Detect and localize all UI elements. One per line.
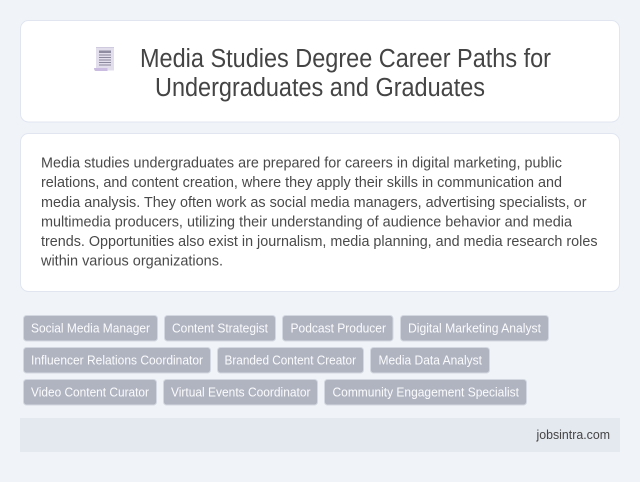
tag: Content Strategist: Content Strategist xyxy=(172,320,268,336)
panel: header card xyxy=(20,20,620,122)
tag: Podcast Producer: Podcast Producer xyxy=(290,320,387,336)
tag: Influencer Relations Coordinator: Influencer Relations Coordinator xyxy=(31,352,204,368)
tag: Digital Marketing Analyst xyxy=(400,316,548,341)
title: Media Studies Degree Career Paths for xyxy=(140,45,551,73)
tag: Digital Marketing Analyst: Digital Marketing Analyst xyxy=(408,320,541,336)
tag: Social Media Manager xyxy=(24,316,158,341)
tag: Video Content Curator xyxy=(24,380,156,405)
tag: Branded Content Creator xyxy=(218,348,364,373)
tag: Community Engagement Specialist xyxy=(324,380,526,405)
panel: description card xyxy=(20,134,620,292)
tag: Video Content Curator: Video Content Curator xyxy=(31,384,150,400)
tag: Content Strategist xyxy=(164,316,276,341)
footer source: jobsintra.com: jobsintra.com xyxy=(536,427,610,442)
footer bar xyxy=(20,418,620,452)
tag: Podcast Producer xyxy=(282,316,393,341)
tag: Virtual Events Coordinator xyxy=(164,380,318,405)
tags: career paths xyxy=(24,316,548,405)
tag: Influencer Relations Coordinator xyxy=(24,348,210,373)
title xyxy=(140,45,551,102)
tag: Social Media Manager: Social Media Manager xyxy=(31,320,151,336)
description text: relations, and content creation, where they apply their skills in communication and xyxy=(41,175,562,191)
tag: Community Engagement Specialist: Community Engagement Specialist xyxy=(332,384,519,400)
title: Undergraduates and Graduates xyxy=(155,74,485,102)
icon: document scroll xyxy=(94,47,114,71)
tag: Media Data Analyst xyxy=(370,348,490,373)
description text: trends. Opportunities also exist in journalism, media planning, and media research roles xyxy=(41,234,598,250)
description text: media analysis. They often work as social media managers, advertising specialists, or xyxy=(41,195,587,211)
description text: multimedia producers, utilizing their understanding of audience behavior and media xyxy=(41,214,573,230)
description text xyxy=(40,156,597,270)
tag: Branded Content Creator: Branded Content Creator xyxy=(224,352,357,368)
description text: within various organizations. xyxy=(40,254,223,270)
tag: Media Data Analyst: Media Data Analyst xyxy=(378,352,482,368)
description text: Media studies undergraduates are prepared for careers in digital marketing, public xyxy=(41,156,562,172)
tag: Virtual Events Coordinator: Virtual Events Coordinator xyxy=(171,384,311,400)
